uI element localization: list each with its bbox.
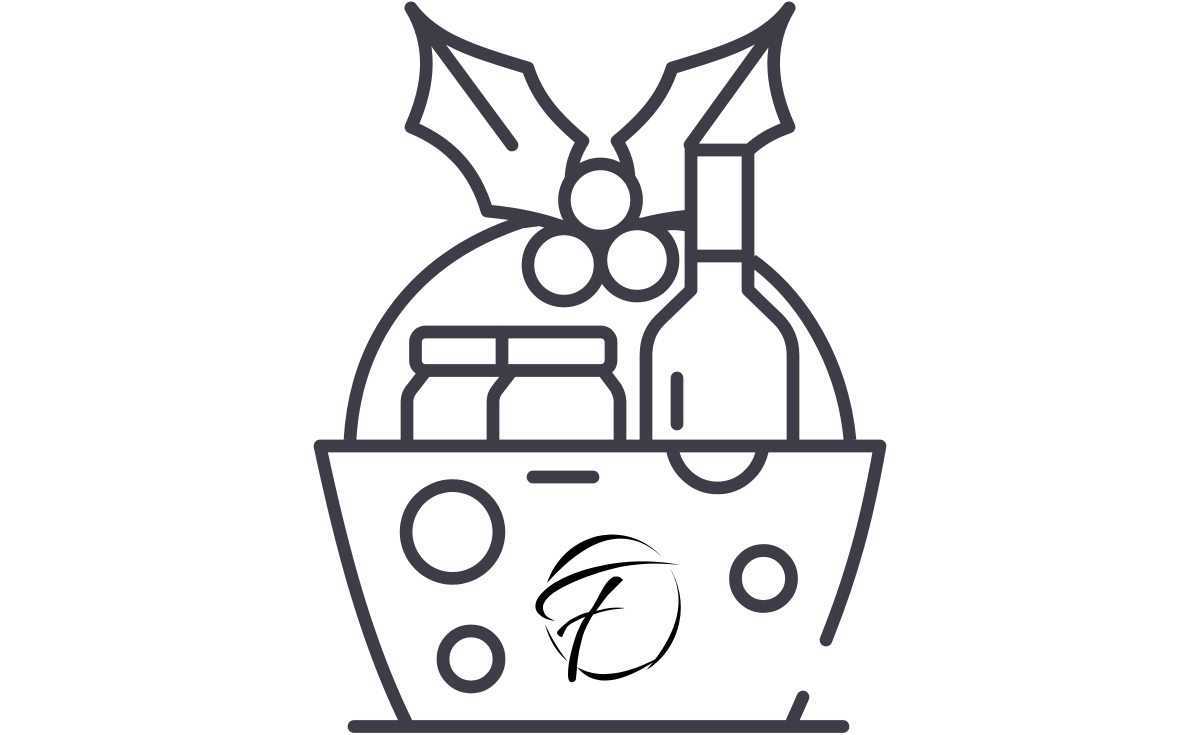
icon: jar lids bbox=[416, 332, 611, 370]
icon: wine bottle bbox=[646, 150, 793, 440]
logo: circled F monogram bbox=[535, 535, 681, 682]
basket dots bbox=[406, 486, 792, 687]
icon: holly berries bbox=[528, 164, 673, 301]
basket body bbox=[320, 446, 880, 726]
pudding dome bbox=[350, 220, 850, 440]
icon: left jar bbox=[407, 372, 425, 440]
icon: right jar bbox=[493, 372, 620, 440]
icon: left holly leaf bbox=[411, 8, 583, 228]
icon: right holly leaf bbox=[617, 8, 789, 226]
